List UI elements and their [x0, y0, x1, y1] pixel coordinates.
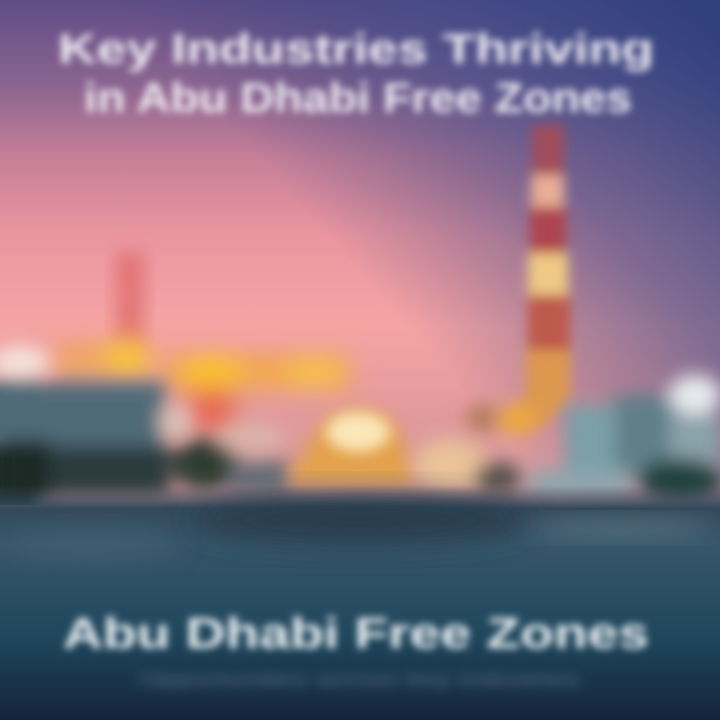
- illustration: golden dome: [285, 410, 418, 485]
- title: [58, 25, 654, 121]
- illustration: right buildings: [414, 375, 720, 502]
- background: dusk sky: [0, 0, 720, 560]
- illustration: left buildings: [0, 346, 290, 505]
- illustration: glowing bridge: [55, 338, 350, 432]
- illustration: tall striped tower: [505, 125, 570, 425]
- footer heading: Abu Dhabi Free Zones: [63, 609, 649, 658]
- background: foreground road and water: [0, 485, 720, 720]
- title: Key Industries Thriving: [58, 25, 654, 72]
- title: in Abu Dhabi Free Zones: [84, 74, 632, 121]
- footer caption: Opportunities across key industries: [140, 672, 580, 689]
- illustration: left distant tower: [116, 252, 144, 347]
